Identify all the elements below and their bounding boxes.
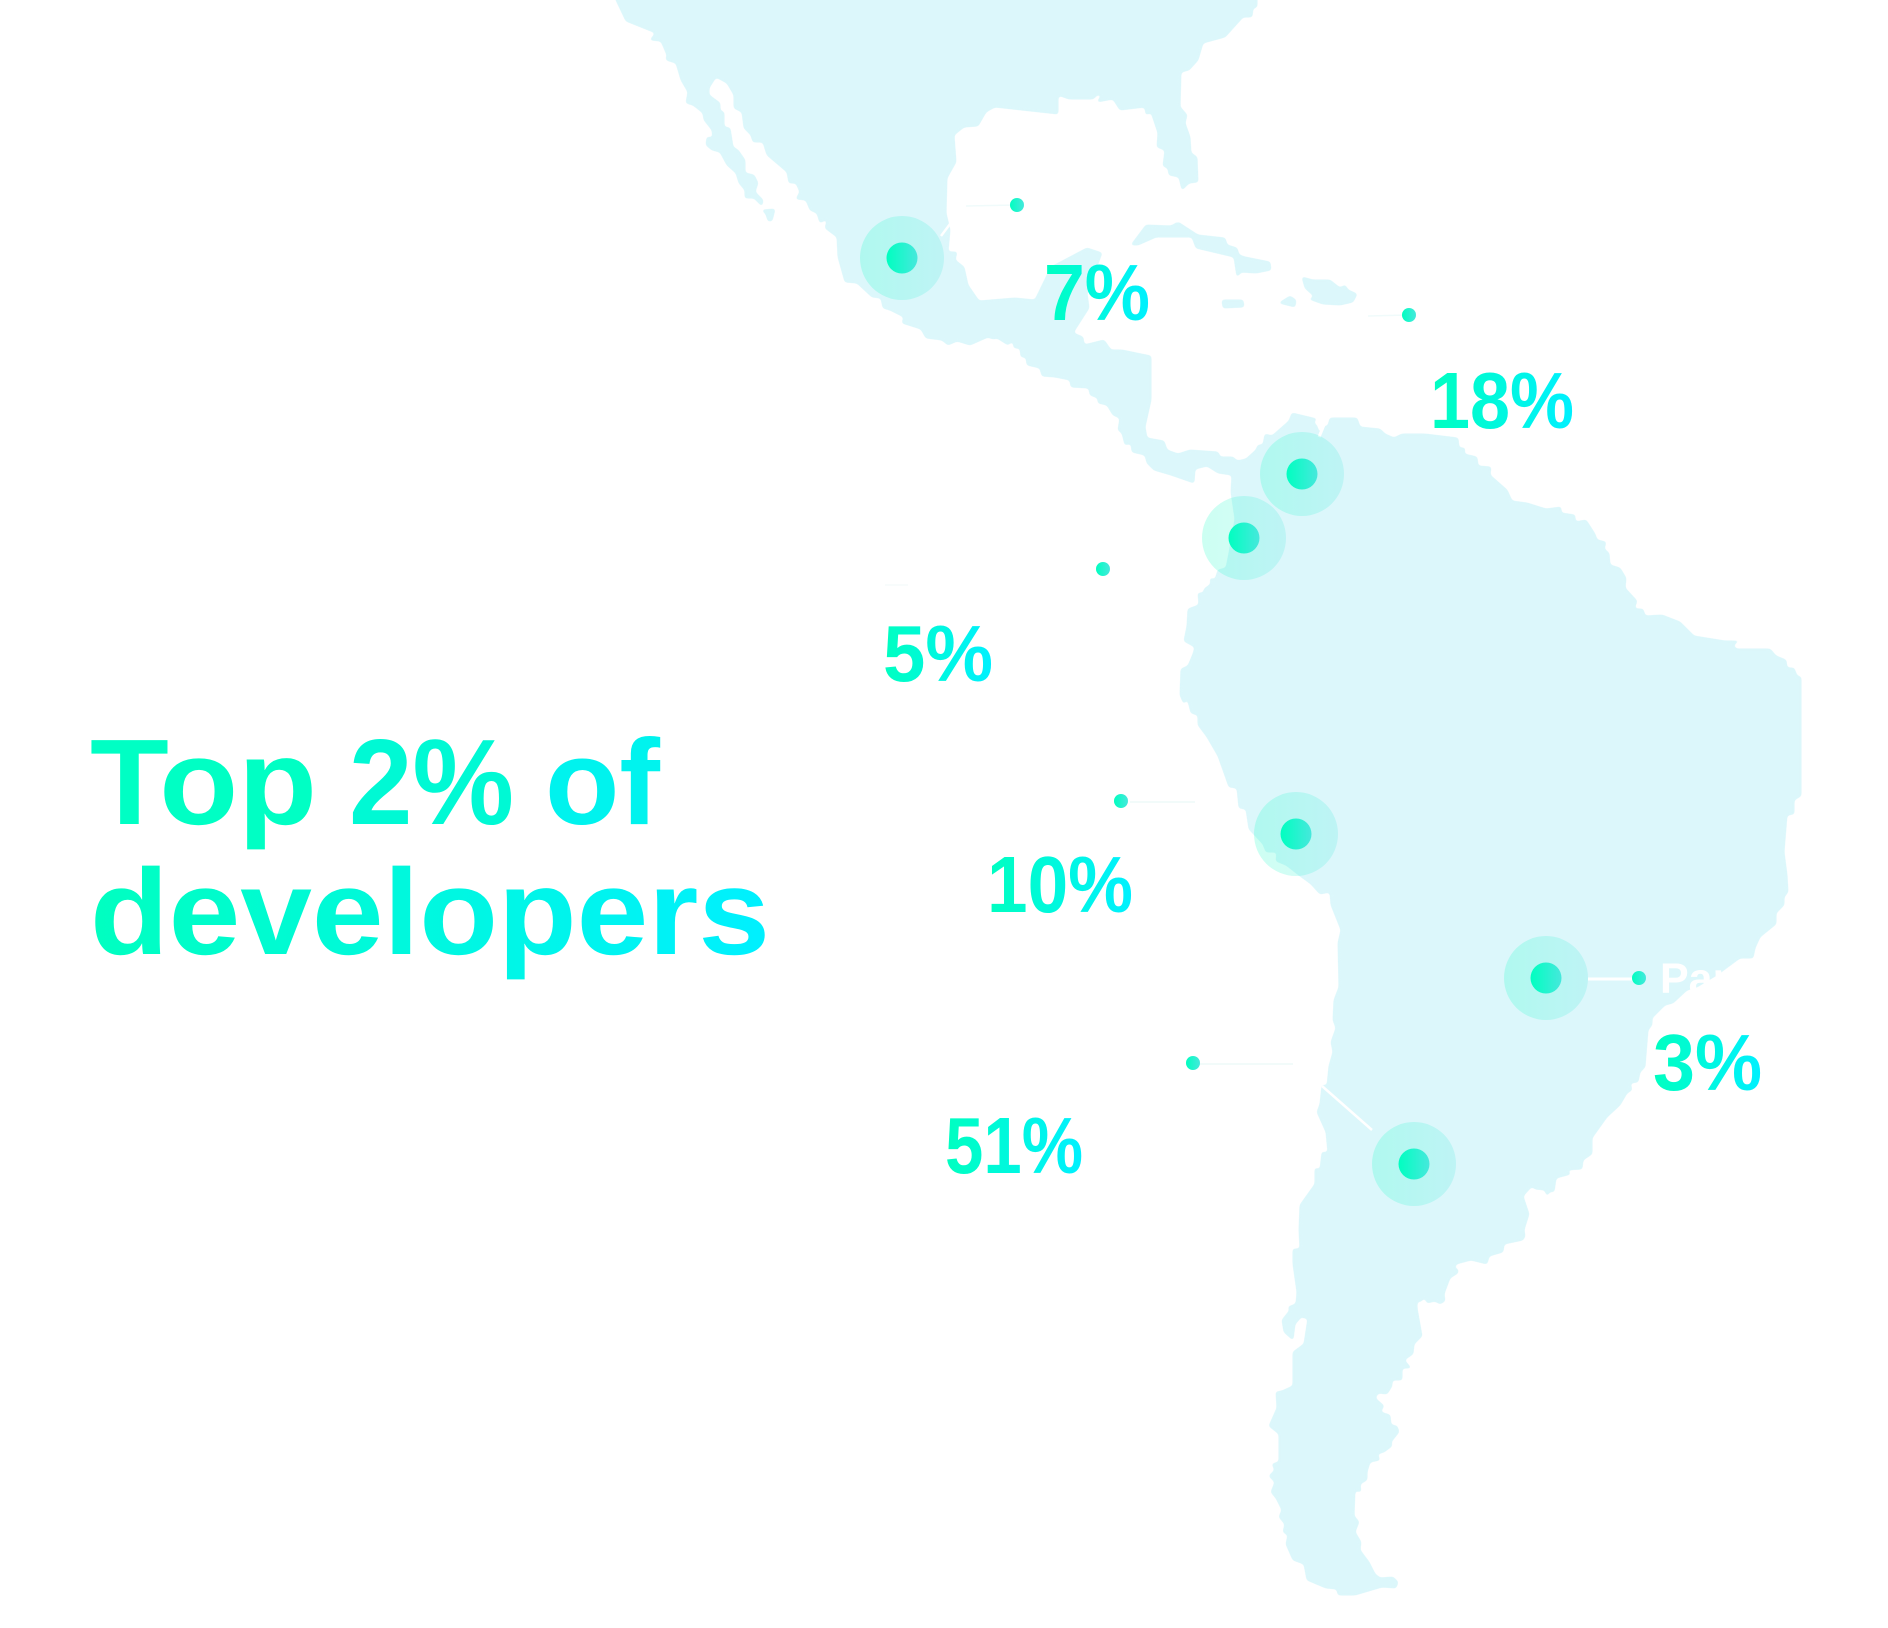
title: Top [90,714,317,850]
pin: Colombia 18%: Colombia [1432,292,1629,340]
title: of [545,714,660,850]
pin: Peru 10%: 10% [987,840,1133,929]
pin: Argentina 51%: Argentina [950,1040,1152,1088]
pin: Paraguay 3%: Paraguay [1660,955,1854,1003]
pin: Paraguay 3% [1504,936,1854,1107]
pin: Mexico 7%: 7% [1044,248,1150,337]
connector lines [885,205,1639,1130]
pin: Paraguay 3%: 3% [1653,1018,1762,1107]
pin: Argentina 51% [945,1040,1456,1206]
pin: Ecuador 5%: Ecuador [884,546,1056,594]
pin: Ecuador 5%: 5% [883,609,993,698]
pin: Ecuador 5% [883,496,1286,698]
pin: Colombia 18%: 18% [1430,356,1574,445]
pin: Peru 10% [987,778,1338,929]
title [90,714,770,980]
pin: Mexico 7%: Mexico [1044,184,1190,232]
pin: Mexico 7% [860,184,1190,337]
pin: Colombia 18% [1260,292,1629,516]
pin: Argentina 51%: 51% [945,1101,1083,1190]
title: developers [90,844,770,980]
title: 2% [349,714,514,850]
map of Latin America [610,0,1801,1595]
pin: Peru 10%: Peru [1008,778,1104,826]
